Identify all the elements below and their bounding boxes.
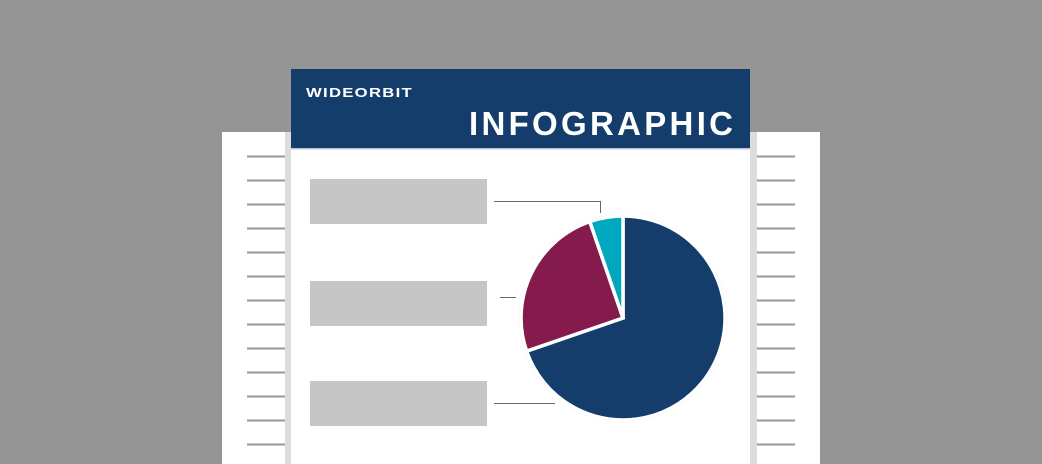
label box 3 — [310, 381, 487, 426]
pie chart — [519, 214, 727, 422]
back page — [222, 132, 820, 464]
front sheet — [285, 70, 757, 464]
label box 1 — [310, 179, 487, 224]
title: INFOGRAPHIC — [469, 105, 733, 142]
header — [291, 69, 750, 150]
label box 2 — [310, 281, 487, 326]
connectors — [494, 202, 600, 404]
logo: WIDEORBIT — [306, 85, 413, 100]
